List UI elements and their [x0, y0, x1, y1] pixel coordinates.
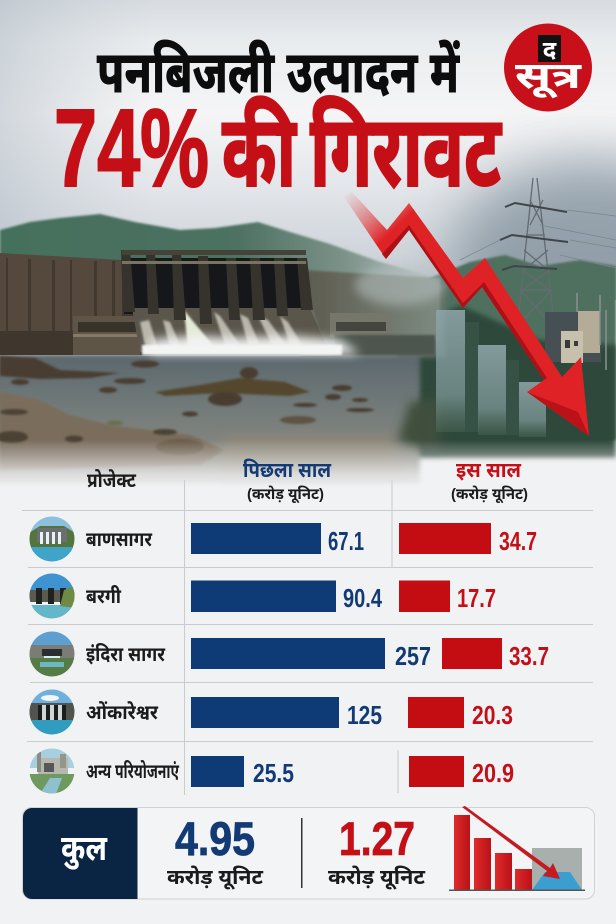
- spray: [150, 336, 360, 354]
- column header: this year: इस साल: [456, 459, 521, 482]
- row: Omkareshwar: [29, 689, 513, 736]
- icon: dam: [29, 689, 75, 736]
- bar this year: [442, 638, 502, 669]
- label: ओंकारेश्वर: [86, 700, 159, 724]
- value: 90.4: [343, 583, 382, 613]
- value: 125: [347, 700, 382, 730]
- bar this year: [409, 756, 464, 787]
- far mountain: [0, 214, 430, 300]
- table: [22, 458, 593, 795]
- row: Bansagar: [29, 516, 537, 563]
- title: [54, 40, 502, 210]
- title line 2: 74%: [54, 87, 209, 210]
- bar last year: [191, 580, 336, 612]
- last year total: 4.95: [175, 812, 255, 865]
- icon: dam: [29, 573, 75, 619]
- table grid lines: [22, 480, 593, 795]
- piers: [121, 250, 313, 324]
- total label box: कुल: [61, 829, 108, 870]
- value: 20.3: [472, 700, 513, 730]
- panel: total: [22, 806, 594, 899]
- label: बरगी: [86, 584, 122, 608]
- glass bars: [436, 310, 465, 432]
- bar this year: [399, 523, 491, 554]
- mist right: [355, 265, 445, 305]
- bar last year: [191, 638, 385, 669]
- spillway: [132, 308, 328, 352]
- right dam wall: [302, 270, 440, 340]
- column header: last year: पिछला साल: [243, 458, 331, 482]
- this year total: [328, 812, 426, 890]
- bar this year: [408, 697, 464, 728]
- column header: last year: [243, 458, 331, 504]
- row: other projects: [29, 748, 514, 794]
- logo: the sootr: सूत्र: [515, 55, 582, 98]
- value: 257: [395, 641, 431, 671]
- row: Indira Sagar: [29, 631, 549, 678]
- title line 1: पनबिजली उत्पादन में: [97, 40, 460, 105]
- bar last year: [191, 697, 339, 728]
- column header: last year: (करोड़ यूनिट): [247, 486, 324, 504]
- value: 34.7: [499, 526, 537, 556]
- last year total: करोड़ यूनिट: [167, 865, 264, 890]
- icon: dam: [29, 516, 75, 563]
- icon: falling bars with dam: [449, 806, 585, 891]
- value: 33.7: [509, 641, 549, 671]
- value: 25.5: [253, 758, 294, 788]
- label: इंदिरा सागर: [86, 642, 166, 666]
- left dam wall: [0, 253, 122, 335]
- icon: power station: [29, 748, 75, 794]
- dam base: [0, 262, 306, 355]
- gates dark: [124, 258, 306, 314]
- title line 2: गिरावट: [310, 96, 502, 208]
- total label box: [23, 808, 138, 899]
- building: [545, 293, 606, 370]
- column header: this year: (करोड़ यूनिट): [451, 486, 528, 504]
- row: Bargi: [29, 573, 496, 619]
- title line 2: की: [222, 96, 297, 208]
- river: [0, 354, 420, 484]
- this year total: 1.27: [339, 812, 415, 865]
- icon: dam: [29, 631, 75, 678]
- last year total: [167, 812, 264, 890]
- value: 17.7: [457, 583, 496, 613]
- rocks: [0, 356, 374, 424]
- powerhouse: [73, 316, 140, 355]
- logo: the sootr: द: [543, 37, 557, 64]
- bar last year: [191, 523, 321, 554]
- fade to table: [0, 440, 616, 510]
- column header: project: प्रोजेक्ट: [87, 468, 137, 492]
- label: बाणसागर: [86, 529, 153, 551]
- logo: the sootr: [504, 24, 592, 112]
- photo: dam, river, pylon: [0, 0, 616, 510]
- bar last year: [191, 756, 244, 787]
- value: 67.1: [328, 526, 364, 556]
- title line 2: [54, 87, 502, 210]
- label: अन्य परियोजनाएं: [86, 759, 180, 783]
- near bank: [0, 392, 225, 470]
- bar this year: [399, 580, 450, 612]
- pylon: [460, 178, 616, 330]
- red falling arrow: [344, 192, 589, 436]
- right hill: [400, 255, 616, 440]
- this year total: करोड़ यूनिट: [328, 865, 426, 890]
- value: 20.9: [472, 758, 514, 788]
- column header: this year: [451, 459, 528, 504]
